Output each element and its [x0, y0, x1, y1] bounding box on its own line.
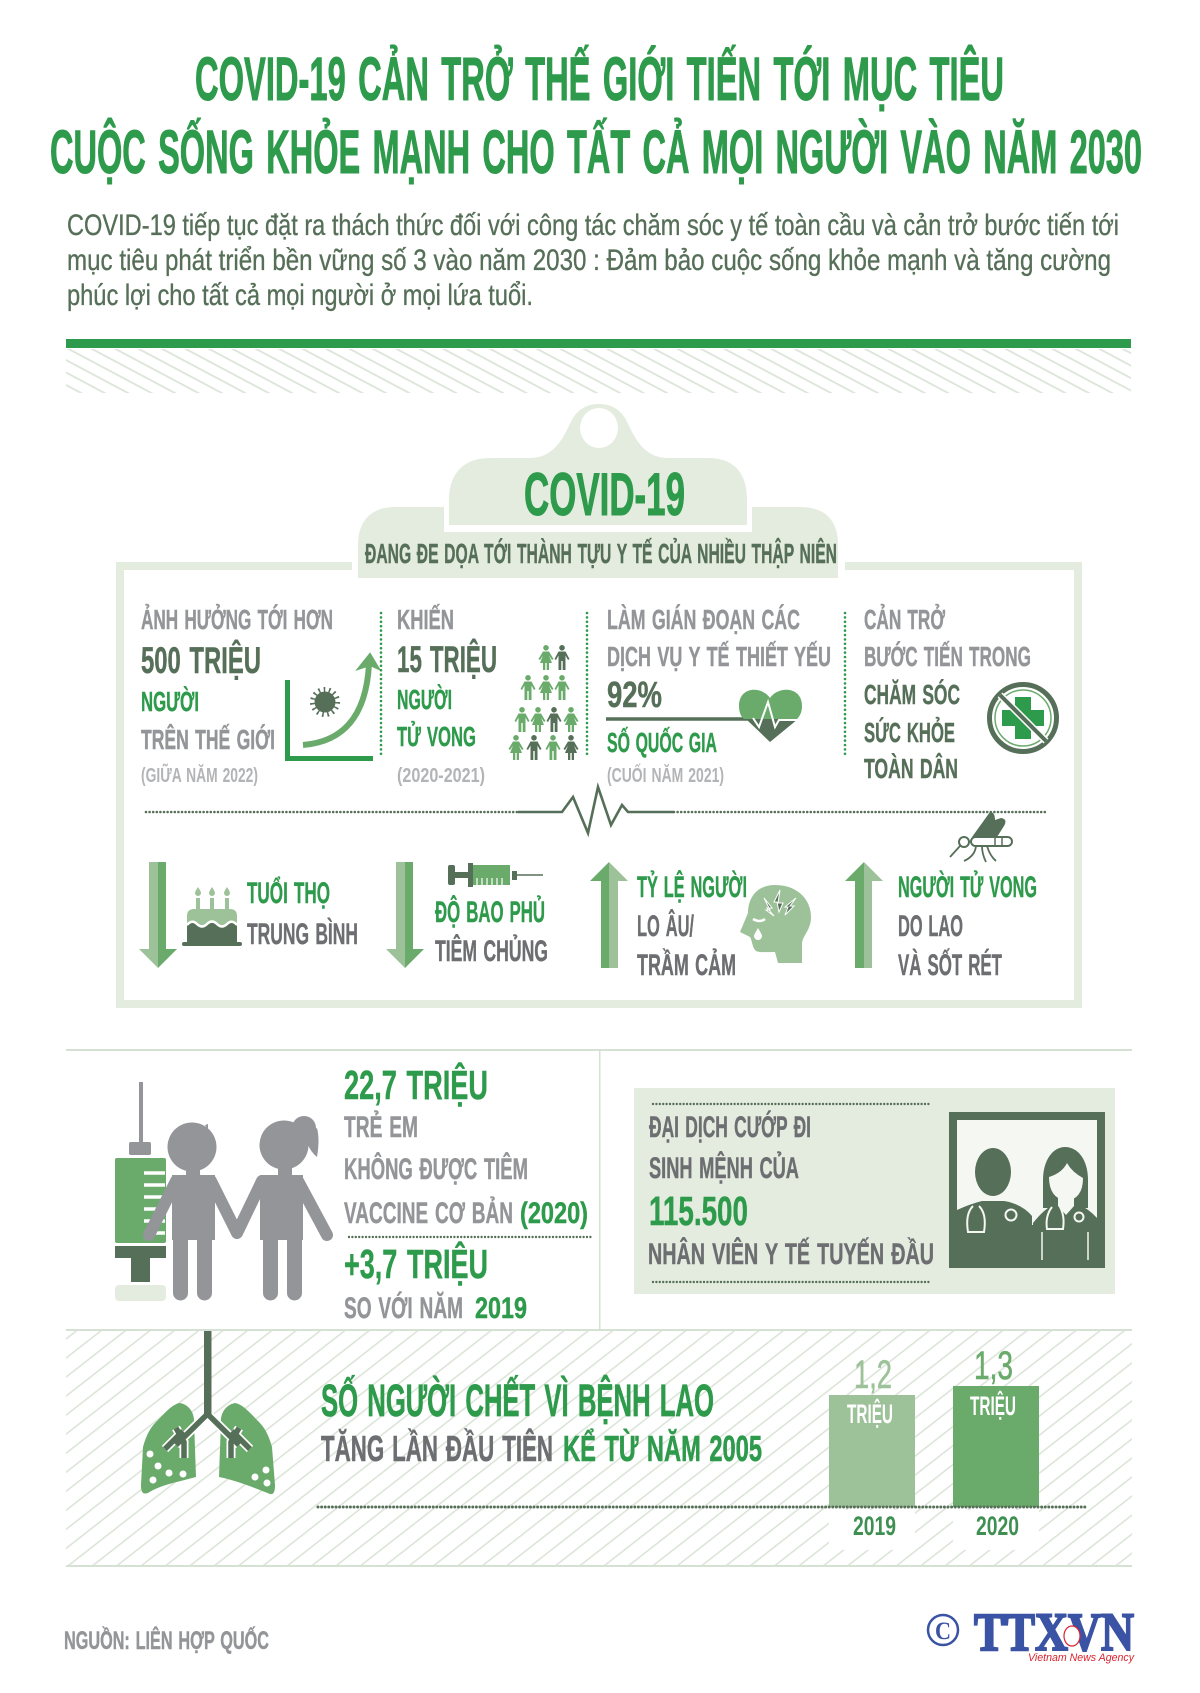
column: 15 trieu: (2020-2021)	[397, 765, 485, 787]
bar 2020: 2020	[976, 1511, 1019, 1541]
column: cham soc suc khoe: CẢN TRỞ	[864, 603, 945, 635]
text: health workers: 115.500	[649, 1188, 748, 1234]
text: vaccination coverage: TIÊM CHỦNG	[435, 934, 548, 968]
text: children not vaccinated: (2020)	[520, 1197, 588, 1230]
icon: mosquito	[950, 812, 1012, 862]
column: 500 trieu: NGƯỜI	[141, 686, 199, 717]
icon: head with lightning and tear	[740, 885, 811, 963]
text: health workers: SINH MỆNH CỦA	[649, 1151, 799, 1185]
bar 2019	[829, 1353, 915, 1541]
arrow down: vaccination coverage	[386, 862, 424, 968]
text: anxiety rate: TỶ LỆ NGƯỜI	[637, 870, 747, 904]
text: malaria deaths	[898, 870, 1037, 982]
bar 2020	[953, 1344, 1039, 1541]
text: malaria deaths: VÀ SỐT RÉT	[898, 948, 1002, 982]
column: 15 trieu: TỬ VONG	[397, 720, 476, 752]
icon: prohibited health cross	[990, 684, 1056, 752]
arrow up: anxiety rate	[590, 862, 628, 968]
text: health workers: NHÂN VIÊN Y TẾ TUYẾN ĐẦU	[648, 1237, 934, 1271]
panel: tuberculosis	[66, 1329, 1132, 1567]
text: health workers	[648, 1110, 934, 1271]
source: NGUỒN: LIÊN HỢP QUỐC	[64, 1625, 269, 1655]
arrow up: malaria deaths	[845, 862, 883, 968]
text: children not vaccinated: 22,7 TRIỆU	[344, 1062, 488, 1108]
column: 15 trieu: NGƯỜI	[397, 684, 452, 715]
logo: TTXVN: TTXVN	[974, 1602, 1134, 1662]
clipboard frame	[120, 566, 1078, 1004]
column: 92%	[607, 604, 831, 787]
divider dotted 1	[380, 613, 382, 757]
icon: vertical syringe	[115, 1082, 166, 1301]
text: malaria deaths: DO LAO	[898, 910, 963, 943]
logo: TTXVN: Vietnam News Agency	[1028, 1652, 1135, 1664]
bar 2019: TRIỆU	[847, 1398, 893, 1429]
bar 2020: 1,3	[974, 1344, 1013, 1388]
column: 500 trieu: (GIỮA NĂM 2022)	[141, 763, 258, 787]
text: life expectancy: TUỔI THỌ	[247, 876, 330, 910]
divider with pulse line	[146, 787, 1047, 833]
text: tuberculosis heading: SỐ NGƯỜI CHẾT VÌ BỆNH LAO	[321, 1375, 714, 1426]
column: cham soc suc khoe	[864, 603, 1031, 784]
title	[50, 45, 1142, 186]
column: 92%: 92%	[607, 674, 662, 715]
bar chart: tuberculosis deaths	[318, 1344, 1085, 1541]
text: life expectancy	[247, 876, 358, 951]
column: 15 trieu: KHIẾN	[397, 604, 454, 635]
text: tuberculosis heading: TĂNG LẦN ĐẦU TIÊN	[321, 1427, 553, 1469]
divider dotted 3	[844, 613, 846, 757]
column: cham soc suc khoe: TOÀN DÂN	[864, 753, 958, 784]
text: anxiety rate	[637, 870, 747, 982]
text: vaccination coverage	[435, 895, 548, 968]
column: 500 trieu: 500 TRIỆU	[141, 639, 261, 681]
column: 92%: SỐ QUỐC GIA	[607, 726, 717, 758]
text: children not vaccinated: VACCINE CƠ BẢN	[344, 1196, 513, 1230]
clipboard lower tab	[358, 507, 838, 578]
text: malaria deaths: NGƯỜI TỬ VONG	[898, 870, 1037, 904]
text: children not vaccinated: +3,7 TRIỆU	[344, 1241, 488, 1287]
text: life expectancy: TRUNG BÌNH	[247, 917, 358, 951]
arrow down: life expectancy	[139, 862, 177, 968]
column: 15 trieu: 15 TRIỆU	[397, 638, 497, 680]
column: 92%: LÀM GIÁN ĐOẠN CÁC	[607, 604, 800, 635]
text: health workers: ĐẠI DỊCH CƯỚP ĐI	[649, 1110, 811, 1144]
text: anxiety rate: TRẦM CẢM	[637, 948, 736, 982]
intro text	[67, 209, 1119, 312]
panel: clipboard COVID-19	[120, 404, 1078, 1004]
heading COVID-19: COVID-19	[524, 461, 685, 528]
column: cham soc suc khoe: SỨC KHỎE	[864, 716, 955, 748]
column: cham soc suc khoe: CHĂM SÓC	[864, 679, 960, 710]
clipboard upper clip	[449, 404, 747, 525]
text: children not vaccinated: SO VỚI NĂM	[344, 1291, 463, 1325]
intro text: phúc lợi cho tất cả mọi người ở mọi lứa tuổi.	[67, 279, 533, 312]
icon: group of people	[508, 645, 578, 760]
text: tuberculosis heading	[321, 1375, 762, 1469]
column: 15 trieu	[397, 604, 497, 787]
text: children not vaccinated: 2019	[475, 1292, 527, 1325]
bar 2019: 2019	[853, 1511, 896, 1541]
green rule with hatched band	[66, 339, 1131, 393]
column: 500 trieu: ẢNH HƯỞNG TỚI HƠN	[141, 603, 333, 635]
section dividers	[66, 1049, 1132, 1329]
bar 2020: TRIỆU	[970, 1390, 1016, 1421]
icon: birthday cake	[182, 887, 242, 946]
panel: health workers	[634, 1088, 1115, 1294]
icon: growth chart with virus	[285, 654, 379, 761]
logo: TTXVN	[928, 1602, 1135, 1664]
icon: children holding hands	[149, 1116, 327, 1301]
text: children not vaccinated: TRẺ EM	[344, 1110, 418, 1144]
text: children not vaccinated	[344, 1062, 591, 1325]
bar 2019: 1,2	[854, 1353, 892, 1397]
column: 92%: (CUỐI NĂM 2021)	[607, 763, 724, 787]
text: vaccination coverage: ĐỘ BAO PHỦ	[435, 895, 545, 929]
logo: TTXVN: C	[935, 1618, 951, 1645]
icon: heart with pulse line	[606, 690, 802, 742]
icon: horizontal syringe	[448, 863, 543, 887]
icon: lungs	[141, 1331, 275, 1494]
column: cham soc suc khoe: BƯỚC TIẾN TRONG	[864, 641, 1031, 672]
text: tuberculosis heading: KỂ TỪ NĂM 2005	[563, 1427, 762, 1469]
column: 500 trieu: TRÊN THẾ GIỚI	[141, 724, 275, 755]
column: 92%: DỊCH VỤ Y TẾ THIẾT YẾU	[607, 641, 831, 672]
subheading: ĐANG ĐE DỌA TỚI THÀNH TỰU Y TẾ CỦA NHIỀU THẬP NIÊN	[365, 537, 837, 569]
text: anxiety rate: LO ÂU/	[637, 909, 694, 943]
column: 500 trieu	[141, 603, 333, 787]
text: children not vaccinated: KHÔNG ĐƯỢC TIÊM	[344, 1152, 528, 1186]
icon: doctors in frame	[949, 1112, 1105, 1268]
divider dotted 2	[586, 613, 588, 757]
